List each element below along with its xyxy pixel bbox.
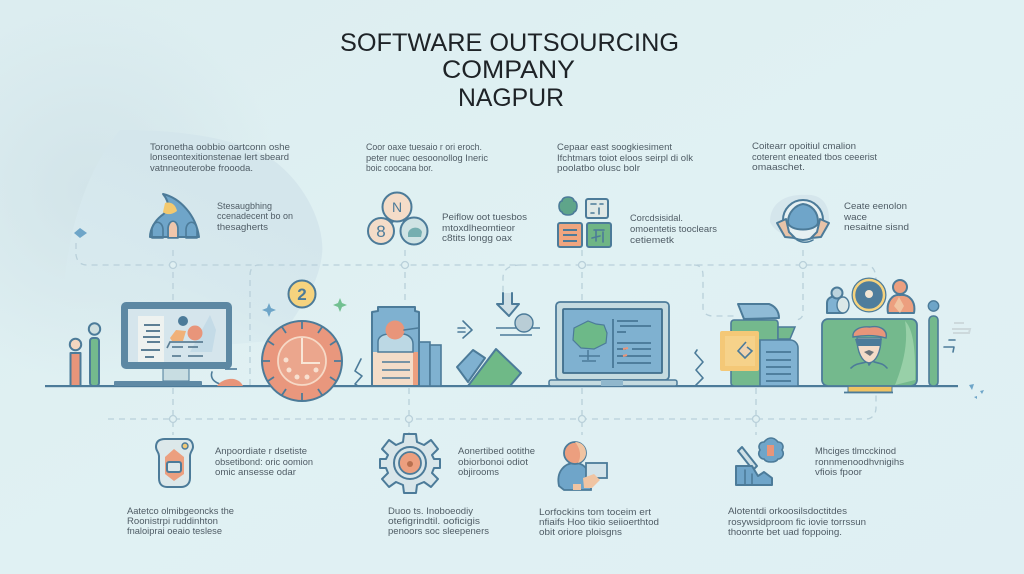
text block: top 3: poolatbo olusc bolr: [557, 163, 640, 174]
icon: down arrow with ball: [496, 293, 540, 335]
text block: top 1: vatnneouterobe froooda.: [150, 163, 253, 174]
text block: top 1 side: Stesaugbhing: [217, 201, 272, 212]
text block: top 4: omaaschet.: [752, 162, 805, 173]
text block: top 4 side: Ceate eenolon: [844, 201, 907, 212]
icon: tools with flower badge: [736, 438, 783, 485]
icon: hooded figure with halo: [770, 195, 829, 242]
dashed connector network: [76, 243, 876, 435]
text block: top 2 side: mtoxdlheomtieor: [442, 223, 515, 234]
icon: numbered badge: [288, 280, 316, 308]
text block: bottom 4 side: ronnmenoodhvnigihs: [815, 457, 904, 468]
text block: bottom 2 side: objirooms: [458, 467, 499, 478]
text block: top 1: Toronetha oobbio oartconn oshe: [150, 142, 290, 153]
text block: top 1 side: ccenadecent bo on: [217, 211, 293, 222]
text block: top 4: Coitearr opoitiul cmalion: [752, 141, 856, 152]
text block: top 2: [366, 142, 488, 174]
icon: green screen with avatar: [822, 319, 917, 392]
text block: bottom 1: fnaloiprai oeaio teslese: [127, 526, 222, 537]
text block: bottom 2: [388, 506, 489, 537]
text block: bottom 4: thoonrte bet uad foppoing.: [728, 527, 842, 538]
icon: four app tiles: [558, 197, 611, 247]
text block: bottom 1: [127, 506, 234, 537]
icon: blue sparkle: [262, 303, 276, 317]
icon: clock: [262, 321, 342, 401]
text block: bottom 4 side: Mhciges tlmcckinod: [815, 446, 896, 457]
text block: bottom 1 side: obsetibond: oric oomion: [215, 457, 313, 468]
text block: top 3: Cepaar east soogkiesiment: [557, 142, 672, 153]
text block: top 3 side: Corcdsisidal.: [630, 213, 683, 224]
decorative marks: right edge: [944, 323, 984, 399]
text block: bottom 4 side: [815, 446, 904, 478]
title: [340, 29, 679, 112]
text block: top 2: boic coocana bor.: [366, 163, 433, 174]
text block: top 1: lonseontexitionstenae lert sbeard: [150, 152, 289, 163]
text block: top 2: peter nuec oesoonollog Ineric: [366, 153, 488, 164]
text block: bottom 3: Lorfockins tom toceim ert: [539, 507, 651, 518]
text block: top 4 side: [843, 201, 909, 233]
text block: bottom 3: obit oriore ploisgns: [539, 527, 622, 538]
icon: desktop monitor: [114, 302, 243, 386]
text block: bottom 2: otefigrindtil. ooficigis: [388, 516, 480, 527]
text block: top 3 side: [630, 213, 717, 246]
text block: top 2 side: c8tits longg oax: [442, 233, 512, 244]
text block: top 1 side: [217, 201, 293, 233]
text block: bottom 1 side: Anpoordiate r dsetiste: [215, 446, 307, 457]
icon: tag badge: [156, 439, 193, 487]
icon: folder, yellow card and document: [720, 304, 798, 386]
text block: bottom 2 side: Aonertibed ootithe: [458, 446, 535, 457]
icon: zigzag spring right: [695, 350, 703, 385]
text block: bottom 1 side: omic ansesse odar: [215, 467, 296, 478]
title: SOFTWARE OUTSOURCING: [340, 29, 679, 57]
bar pair: left indicators: [70, 323, 100, 386]
text block: bottom 1 side: [215, 446, 313, 478]
text block: bottom 4 side: vfiois fpoor: [815, 467, 862, 478]
icon: team figures above screen: [827, 278, 914, 313]
text block: bottom 4: [728, 506, 866, 538]
text block: top 4: coterent eneated tbos ceeerist: [752, 152, 877, 163]
bar: right indicator: [928, 301, 939, 386]
icon: numbered badge: 2: [297, 285, 307, 304]
icon: green and blue folder tags: [457, 349, 521, 386]
text block: top 2 side: [442, 212, 527, 244]
icon: green sparkle: [333, 298, 347, 312]
text block: bottom 3: [539, 507, 659, 538]
text block: bottom 4: Alotentdi orkoosilsdoctitdes: [728, 506, 847, 517]
text block: top 1 side: thesagherts: [217, 222, 268, 233]
title: COMPANY: [442, 56, 575, 84]
text block: top 4 side: wace: [843, 212, 867, 223]
text block: top 4 side: nesaitne sisnd: [844, 222, 909, 233]
icon: person with tablet: [558, 442, 607, 490]
text block: bottom 1: Roonistrpi ruddinhton: [127, 516, 218, 527]
icon: zigzag spring left: [355, 359, 362, 386]
text block: top 3: Ifchtmars toiot eloos seirpl di olk: [557, 153, 693, 164]
icon: blue dome with arches: [150, 194, 199, 238]
text block: bottom 2 side: [458, 446, 535, 478]
icon: profile card with books: [372, 307, 441, 386]
title: NAGPUR: [458, 84, 564, 112]
text block: top 1: [150, 142, 290, 174]
text block: top 4: [752, 141, 877, 173]
icon: three linked circles: 8: [376, 222, 386, 241]
text block: top 3 side: omoentetis tooclears: [630, 224, 717, 235]
text block: bottom 2 side: obiorbonoi odiot: [458, 457, 528, 468]
icon: three linked circles: N: [392, 199, 402, 215]
text block: bottom 3: nfiaifs Hoo tikio seiioerthtod: [539, 517, 659, 528]
text block: bottom 2: Duoo ts. Inoboeodiy: [388, 506, 473, 517]
text block: bottom 1: Aatetco olmibgeoncks the: [127, 506, 234, 517]
icon: right arrow: [458, 321, 472, 338]
text block: bottom 4: rosywsidproom fic iovie torrssun: [728, 517, 866, 528]
icon: small diamond marker: [74, 228, 87, 238]
text block: top 2: Coor oaxe tuesaio r ori eroch.: [366, 142, 482, 153]
text block: bottom 2: penoors soc sleepeners: [388, 526, 489, 537]
icon: laptop: [549, 302, 677, 386]
text block: top 3 side: cetiemetk: [630, 235, 674, 246]
timeline base line: [45, 385, 958, 387]
icon: gear: [380, 434, 440, 493]
text block: top 3: [557, 142, 693, 174]
icon: three linked circles: [368, 192, 428, 244]
text block: top 2 side: Peiflow oot tuesbos: [442, 212, 527, 223]
